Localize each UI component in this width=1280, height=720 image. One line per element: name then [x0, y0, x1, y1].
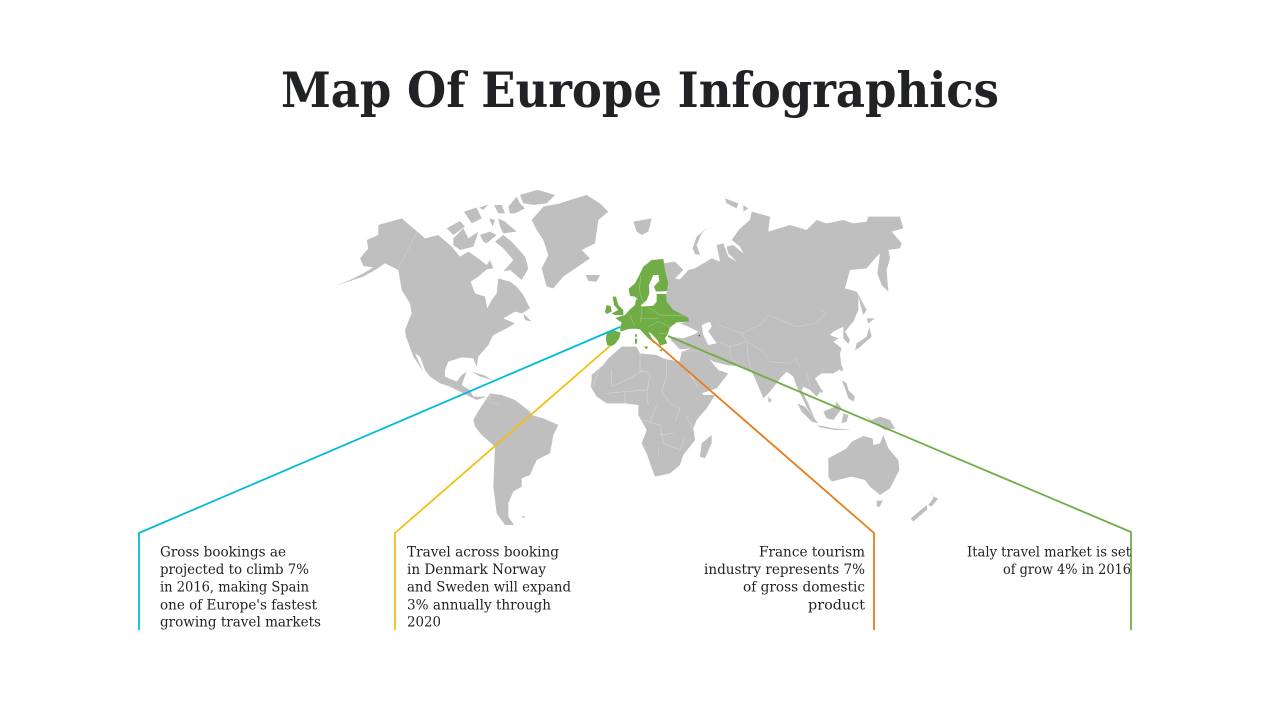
map: Africa — [591, 347, 715, 477]
callout: Denmark Norway Sweden — [395, 346, 610, 630]
map: New Zealand — [911, 487, 938, 522]
map: Caspian Sea — [702, 322, 717, 345]
text: Nordics: in Denmark Norway — [407, 562, 546, 578]
connector: blue — [139, 327, 620, 630]
text: Spain: projected to climb 7% — [160, 562, 309, 578]
text: France: product — [808, 598, 866, 614]
connector: green — [668, 336, 1131, 630]
map: Eurasia — [663, 212, 903, 420]
callout: Italy — [668, 336, 1132, 630]
text: France: France tourism — [759, 544, 865, 560]
map: Japan and Taiwan — [820, 318, 875, 393]
connector: yellow — [395, 346, 610, 630]
callout: France — [650, 338, 874, 630]
map: Australia — [828, 435, 899, 507]
world map — [335, 190, 938, 525]
text: Nordics: 2020 — [407, 614, 441, 630]
text: Spain: one of Europe's fastest — [160, 598, 318, 614]
text: France: industry represents 7% — [704, 562, 865, 578]
text: Spain: in 2016, making Spain — [160, 580, 309, 596]
text: France: of gross domestic — [743, 580, 865, 596]
map: dark speck — [699, 335, 700, 336]
map: Southeast Asia islands — [768, 380, 895, 430]
text: Spain: growing travel markets — [160, 614, 321, 630]
map: Arctic islands — [586, 198, 748, 281]
map: Iceland — [586, 275, 600, 282]
text: Italy: Italy travel market is set — [967, 544, 1132, 560]
map: North America — [335, 190, 555, 400]
map: Greenland — [532, 195, 608, 288]
text: Nordics: Travel across booking — [407, 544, 559, 560]
text: Italy: of grow 4% in 2016 — [1003, 562, 1131, 578]
title: Map Of Europe Infographics — [281, 61, 999, 119]
connector: orange — [650, 338, 874, 630]
text: Nordics: and Sweden will expand — [407, 580, 571, 596]
text: Nordics: 3% annually through — [407, 598, 551, 614]
map: South America — [473, 393, 558, 525]
text: Spain: Gross bookings ae — [160, 544, 286, 560]
map: Europe highlight — [605, 259, 689, 351]
callout: Spain — [139, 327, 620, 630]
